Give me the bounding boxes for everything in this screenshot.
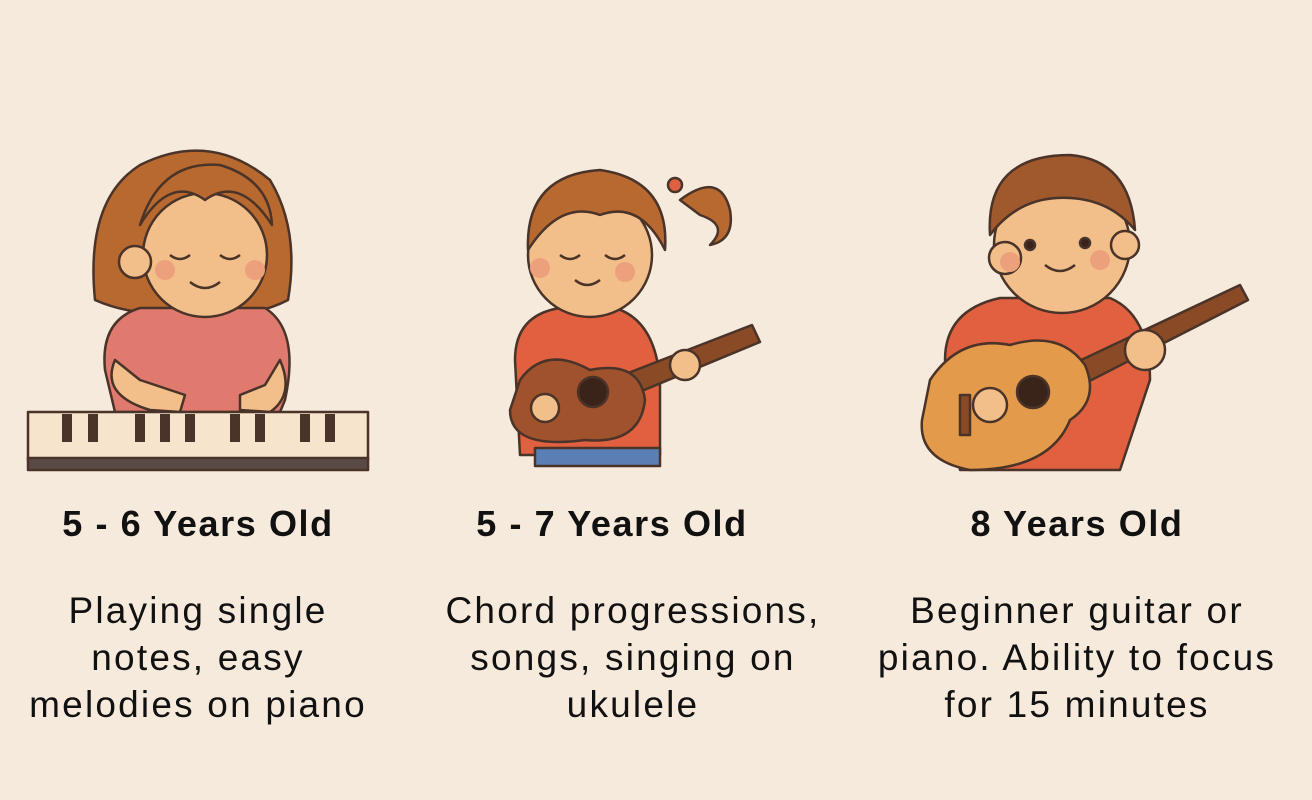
illustration: boy with guitar [922, 155, 1248, 470]
text: column 2: songs, singing on [470, 637, 796, 678]
text: column 3 [878, 590, 1276, 725]
text: column 3: for 15 minutes [944, 684, 1210, 725]
text: column 2 [446, 590, 820, 725]
heading: 8 years: 8 Years Old [970, 503, 1184, 544]
heading: 5-7 years: 5 - 7 Years Old [476, 503, 748, 544]
text: column 2: ukulele [567, 684, 699, 725]
text: column 1: Playing single [68, 590, 328, 631]
illustration: girl at piano [28, 151, 368, 470]
text: column 2: Chord progressions, [446, 590, 820, 631]
heading: 5-6 years: 5 - 6 Years Old [62, 503, 334, 544]
text: column 1 [29, 590, 367, 725]
text: column 3: piano. Ability to focus [878, 637, 1276, 678]
text: column 1: notes, easy [91, 637, 305, 678]
text: column 1: melodies on piano [29, 684, 367, 725]
illustration: girl with ukulele [510, 170, 760, 466]
text: column 3: Beginner guitar or [910, 590, 1244, 631]
